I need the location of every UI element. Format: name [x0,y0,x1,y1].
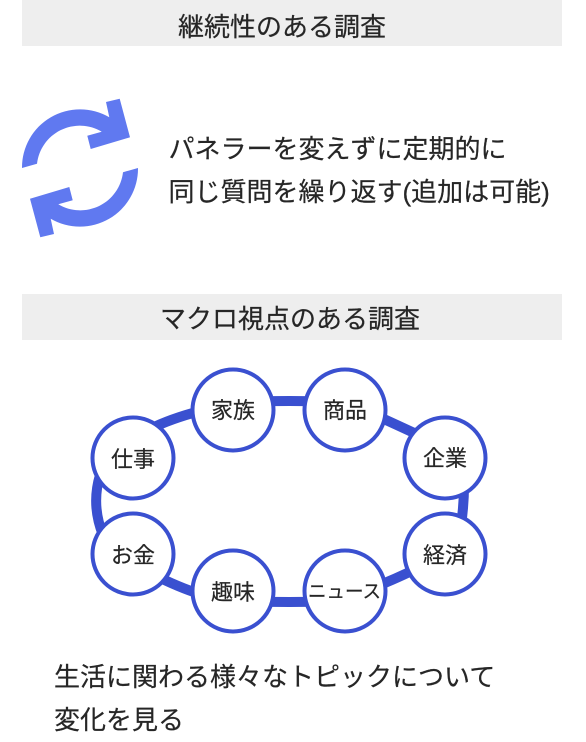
panel: continuity heading bar [22,0,562,46]
node: family [192,370,274,450]
text: macro description: 生活に関わる様々なトピックについて [54,662,495,692]
node: economy [404,514,486,594]
panel: macro heading bar [22,294,562,340]
icon: refresh arrows [22,98,138,238]
text: continuity description [168,134,550,207]
label: money: お金 [111,543,155,568]
label: news: ニュース [308,581,381,602]
label: work: 仕事 [111,447,155,472]
label: family: 家族 [211,398,255,423]
label: hobbies: 趣味 [211,580,255,605]
node: work [92,418,174,498]
label: companies: 企業 [423,446,467,471]
heading: continuity survey: 継続性のある調査 [178,12,386,42]
text: macro description [54,662,495,735]
node: products [304,370,386,450]
node: money [92,514,174,594]
label: economy: 経済 [423,543,467,568]
node: hobbies [192,550,274,632]
node: news [304,550,386,632]
node: companies [404,418,486,498]
label: products: 商品 [323,398,367,423]
heading: macro survey: マクロ視点のある調査 [160,304,420,334]
text: macro description: 変化を見る [54,705,184,735]
text: continuity description: パネラーを変えずに定期的に [168,134,507,164]
text: continuity description: 同じ質問を繰り返す(追加は可能) [168,177,550,207]
